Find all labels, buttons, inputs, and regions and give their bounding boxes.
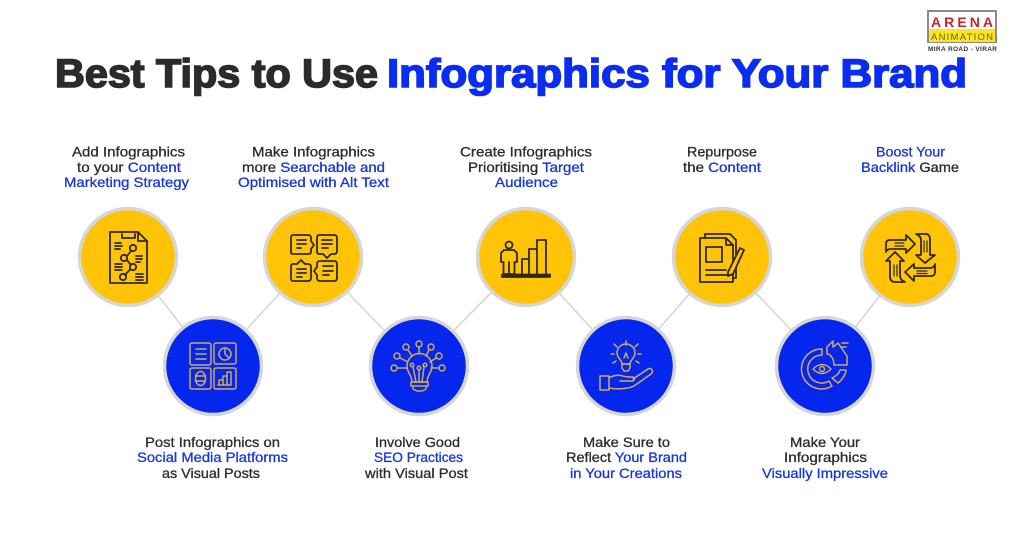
step 2 text: Post Infographics on [145,434,280,450]
icon: circular arrow cycle [886,234,935,282]
title: Best Tips to Use [55,52,378,96]
step 9 text: Boost Your [876,144,945,160]
step 1: content marketing [64,144,189,306]
step 1 text: to your Content [77,159,181,175]
step 6: reflect your brand [566,318,687,481]
icon: circuit light bulb [391,341,445,391]
step 5 text: Create Infographics [460,144,592,160]
icon: hand holding bulb [600,341,652,390]
step 7 text: the Content [683,159,761,175]
step 2: social media [137,318,288,481]
step 4 text: SEO Practices [374,449,463,465]
icon: social panels [190,343,236,389]
step 9 text: Backlink Game [861,159,959,175]
logo: Arena Animation: ARENA [931,14,993,30]
step 4 text: with Visual Post [364,465,468,481]
step 4 text [364,434,468,481]
icon: document with nodes [110,232,147,283]
connector lines [128,257,910,366]
title [55,52,967,96]
step 5 text: Prioritising Target [468,159,584,175]
logo: Arena Animation: ANIMATION [931,32,993,43]
icon: documents and pen [700,234,744,282]
step 5 circle [478,208,574,306]
step 5 text [460,144,592,190]
step 6 text: Reflect Your Brand [566,449,687,465]
logo: Arena Animation: MIRA ROAD - VIRAR [928,46,997,53]
step 1 circle [80,208,176,306]
step 9 text [861,144,959,175]
step 1 text [64,144,189,190]
step 8 circle [776,318,874,414]
step 6 text: Make Sure to [583,434,670,450]
step 3: searchable alt text [238,144,389,306]
step 9 circle [862,208,958,306]
logo: Arena Animation [928,11,997,53]
step 2 text: as Visual Posts [162,465,260,481]
step 3 text: more Searchable and [242,159,385,175]
step 8 text: Visually Impressive [762,465,888,481]
step 5 text: Audience [495,174,558,190]
step 7 text: Repurpose [687,144,757,160]
icon: pie chart with eye [801,341,848,389]
step 4: SEO practices [364,318,468,481]
step 2 text [137,434,288,481]
step 1 text: Add Infographics [72,144,185,160]
step 8 text: Infographics [784,449,867,465]
step 7 circle [674,208,770,306]
step 6 text: in Your Creations [570,465,682,481]
step 6 circle [578,318,674,414]
step 7 text [683,144,761,175]
step 6 text [566,434,687,481]
step 4 circle [370,318,468,414]
step 3 text: Make Infographics [252,144,375,160]
step 2 text: Social Media Platforms [137,449,288,465]
step 1 text: Marketing Strategy [64,174,189,190]
icon: person beside bar chart [501,240,550,277]
step 3 text [238,144,389,190]
step 2 circle [164,318,262,414]
step 9: backlink game [861,144,959,306]
step 3 circle [264,208,362,306]
step 8: visually impressive [762,318,888,481]
title: Infographics for Your Brand [387,52,967,96]
step 8 text [762,434,888,481]
step 8 text: Make Your [790,434,860,450]
step 4 text: Involve Good [375,434,460,450]
step 3 text: Optimised with Alt Text [238,174,389,190]
step 5: target audience [460,144,592,306]
icon: four speech boxes [291,235,337,281]
step 7: repurpose [674,144,770,306]
